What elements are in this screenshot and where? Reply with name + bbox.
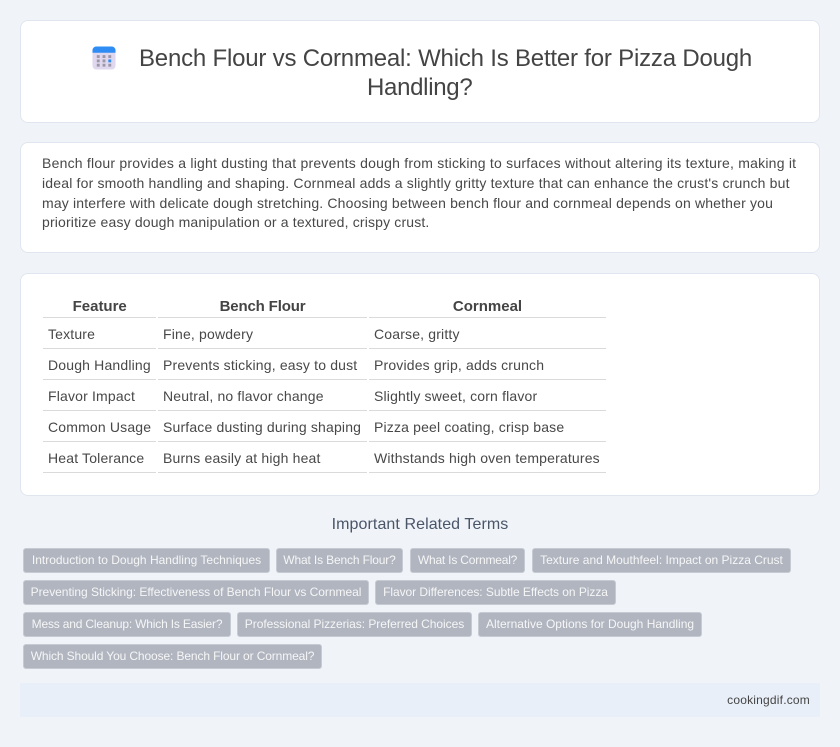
row: common usage: Pizza peel coating, crisp base xyxy=(374,419,564,435)
intro text: may interfere with delicate dough stretching. Choosing between bench flour and cornmeal depends on whether you xyxy=(42,195,773,211)
title: Bench Flour vs Cornmeal: Which Is Better for Pizza Dough xyxy=(139,45,752,72)
title: Handling? xyxy=(367,74,472,101)
row: texture: Coarse, gritty xyxy=(374,326,460,342)
tag: Texture and Mouthfeel: Impact on Pizza Crust xyxy=(540,553,783,567)
tag xyxy=(276,548,403,573)
tag xyxy=(532,548,791,573)
row: texture: Texture xyxy=(48,326,95,342)
tag: Introduction to Dough Handling Techniques xyxy=(32,553,261,567)
row: flavor impact: Flavor Impact xyxy=(48,388,135,404)
title xyxy=(139,45,752,101)
intro text xyxy=(42,155,796,230)
tag xyxy=(23,548,270,573)
comparison table panel xyxy=(20,273,820,496)
tag: Professional Pizzerias: Preferred Choices xyxy=(245,617,464,631)
row: heat tolerance: Heat Tolerance xyxy=(48,450,144,466)
footer source: cookingdif.com xyxy=(727,693,810,707)
row: dough handling xyxy=(48,357,544,373)
row: flavor impact: Neutral, no flavor change xyxy=(163,388,324,404)
tag xyxy=(237,612,472,637)
tag: What Is Bench Flour? xyxy=(283,553,396,567)
row: dough handling: Prevents sticking, easy to dust xyxy=(163,357,357,373)
row: common usage: Common Usage xyxy=(48,419,151,435)
table header: Bench Flour xyxy=(220,298,305,315)
row: heat tolerance: Withstands high oven temperatures xyxy=(374,450,600,466)
row: common usage xyxy=(48,419,564,435)
row: texture xyxy=(48,326,460,342)
header panel xyxy=(20,20,820,123)
tag: Mess and Cleanup: Which Is Easier? xyxy=(32,617,222,631)
comparison table xyxy=(43,298,606,473)
tag: Alternative Options for Dough Handling xyxy=(486,617,694,631)
tag xyxy=(23,580,369,605)
row: texture: Fine, powdery xyxy=(163,326,253,342)
related terms tags xyxy=(23,548,791,669)
intro panel xyxy=(20,142,820,253)
icon: calendar xyxy=(92,46,116,70)
tag: Which Should You Choose: Bench Flour or Cornmeal? xyxy=(31,649,314,663)
row: heat tolerance xyxy=(48,450,600,466)
tag: What Is Cornmeal? xyxy=(418,553,517,567)
table header xyxy=(73,298,522,315)
tag xyxy=(23,612,231,637)
related terms heading: Important Related Terms xyxy=(332,516,508,533)
row: flavor impact xyxy=(48,388,537,404)
row: heat tolerance: Burns easily at high heat xyxy=(163,450,321,466)
row: dough handling: Dough Handling xyxy=(48,357,151,373)
tag: Flavor Differences: Subtle Effects on Pizza xyxy=(383,585,608,599)
tag xyxy=(375,580,616,605)
table header: Cornmeal xyxy=(453,298,522,315)
row: flavor impact: Slightly sweet, corn flavor xyxy=(374,388,537,404)
row: dough handling: Provides grip, adds crunch xyxy=(374,357,544,373)
row: common usage: Surface dusting during shaping xyxy=(163,419,361,435)
tag: Preventing Sticking: Effectiveness of Bench Flour vs Cornmeal xyxy=(31,585,361,599)
tag xyxy=(478,612,702,637)
tag xyxy=(23,644,322,669)
footer bar xyxy=(20,683,820,717)
intro text: ideal for smooth handling and shaping. Cornmeal adds a slightly gritty texture that can enhance the crust's crunch but xyxy=(42,175,790,191)
intro text: prioritize easy dough manipulation or a textured, crispy crust. xyxy=(42,214,430,230)
table header: Feature xyxy=(73,298,127,315)
intro text: Bench flour provides a light dusting that prevents dough from sticking to surfaces without altering its texture, making it xyxy=(42,155,796,171)
tag xyxy=(410,548,525,573)
